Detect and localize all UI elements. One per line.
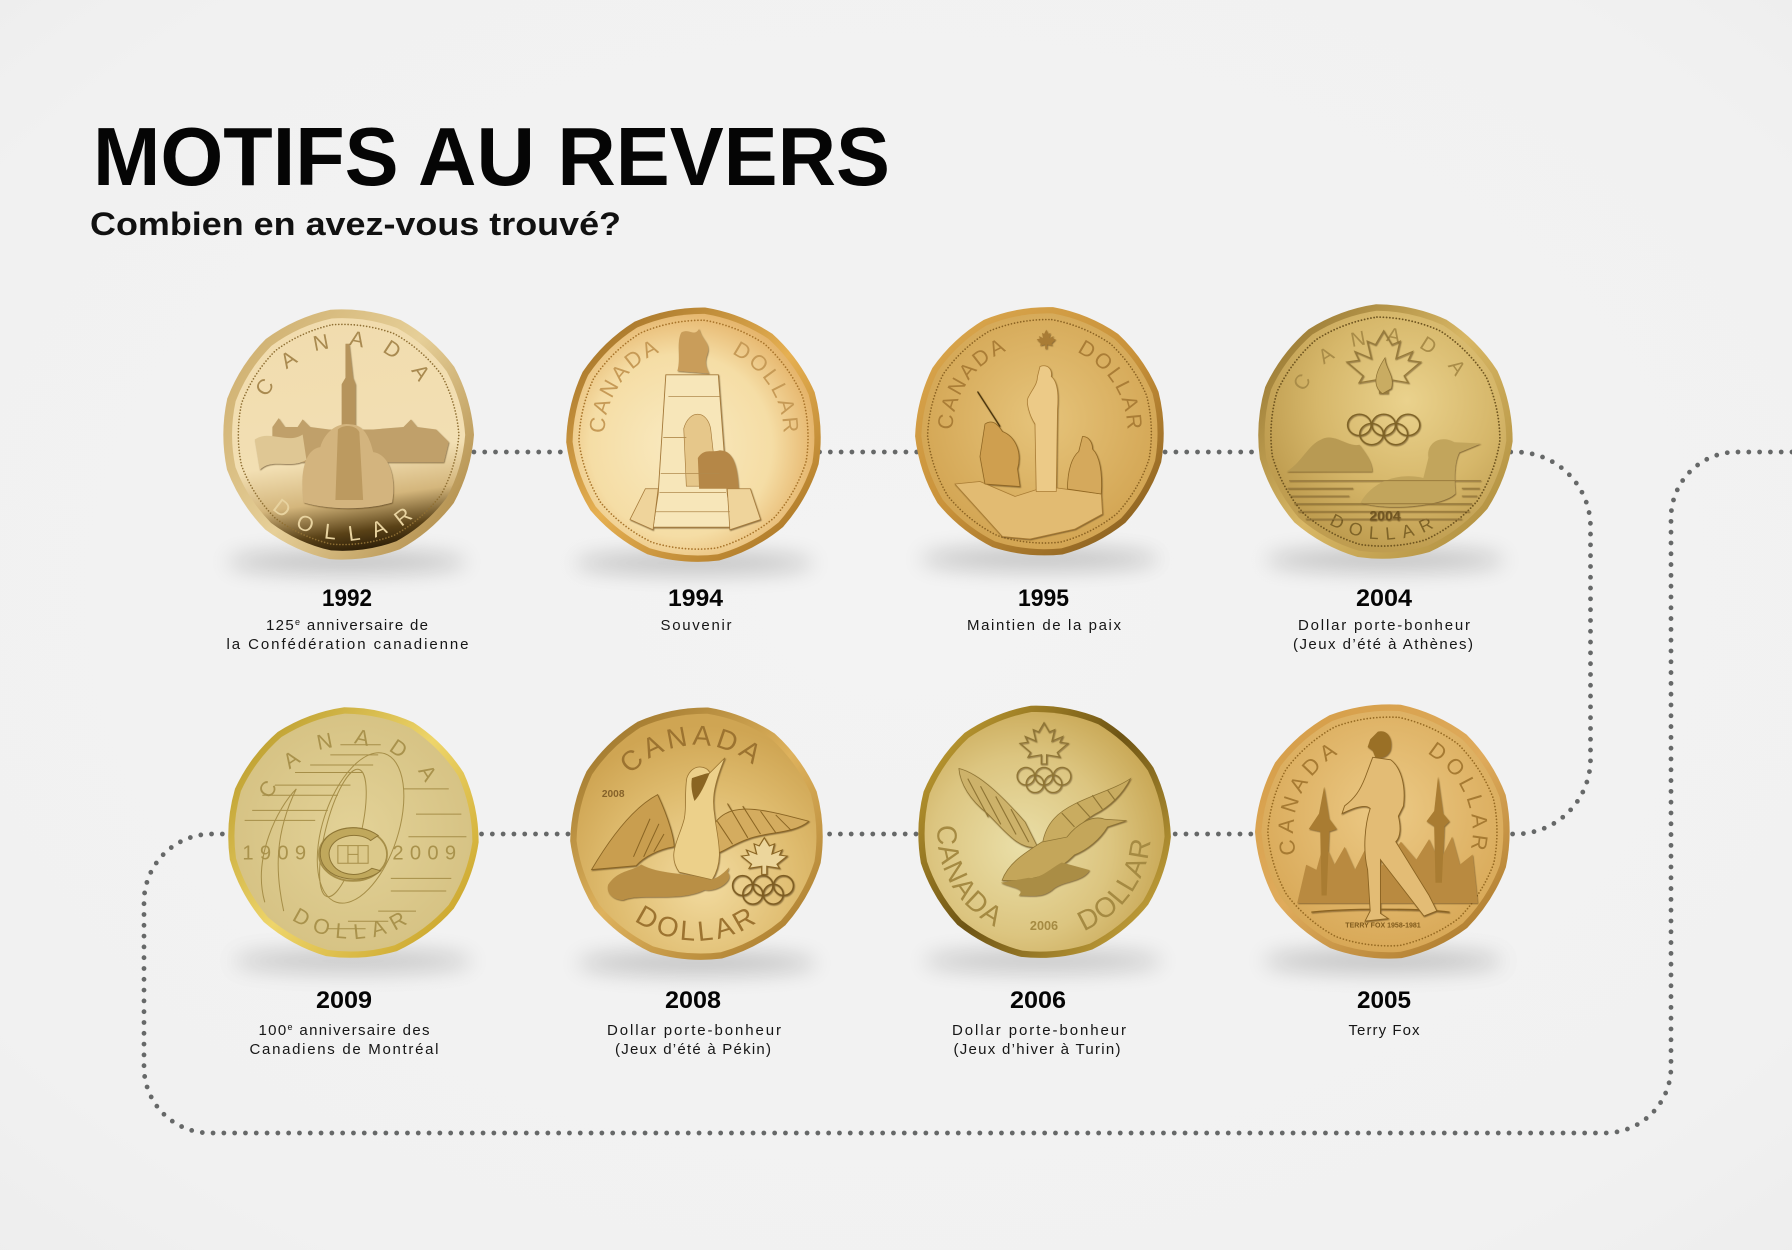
label: 1995: [967, 585, 1122, 634]
motif: Terry Fox running through forest: [1297, 731, 1478, 921]
label: 2004: [1293, 585, 1473, 653]
coin text: Canada Dollar: DOLLAR: [292, 908, 408, 940]
coin text: Canada Dollar: [938, 340, 1142, 429]
label: 2006: Dollar porte-bonheur: [952, 1022, 1126, 1039]
coin text: Canada Dollar: CANADA: [590, 342, 660, 432]
coin text: Canada Dollar: 2008: [602, 789, 625, 800]
label: 2009: [250, 987, 438, 1058]
coin: 2009: [228, 707, 479, 981]
coin text: Canada Dollar: CANADA: [622, 726, 758, 770]
coin: 1994: [566, 308, 821, 584]
label: 2006: (Jeux d’hiver à Turin): [954, 1041, 1120, 1058]
coin text: Canada Dollar: CANADA: [257, 332, 428, 394]
label: 1992: 1992: [322, 585, 372, 612]
label: 2009: 2009: [316, 987, 372, 1014]
coin text: Canada Dollar: DOLLAR: [1077, 840, 1150, 930]
coin text: Canada Dollar: CANADA: [1294, 328, 1464, 389]
label: 2009: e: [288, 1022, 293, 1032]
label: 2006: [952, 987, 1126, 1058]
label: 1995: 1995: [1018, 585, 1069, 612]
coin text: Canada Dollar: [590, 342, 798, 432]
label: 2009: Canadiens de Montréal: [250, 1041, 438, 1058]
motif: Flying loon: [959, 723, 1130, 896]
motif: Leaf, rings and loon: [1286, 331, 1481, 523]
label: 2004: 2004: [1356, 585, 1413, 612]
coin text: Canada Dollar: TERRY FOX 1958-1981: [1345, 922, 1421, 929]
label: 1992: la Confédération canadienne: [226, 636, 468, 653]
label: 2005: 2005: [1357, 987, 1411, 1014]
coin text: Canada Dollar: [1294, 328, 1464, 540]
label: 2009: anniversaire des: [294, 1022, 430, 1039]
motif: Peacekeeping monument: [955, 330, 1102, 539]
label: 2008: Dollar porte-bonheur: [607, 1022, 781, 1039]
coin text: Canada Dollar: DOLLAR: [636, 905, 756, 941]
coin: 2005: [1255, 704, 1510, 982]
coin text: Canada Dollar: [1278, 742, 1488, 929]
motif: National War Memorial: [630, 329, 761, 530]
coin: 1995: [915, 307, 1164, 580]
coin: 1992: [223, 309, 474, 583]
coin text: Canada Dollar: DOLLAR: [1078, 340, 1142, 429]
motif: Parliament and children: [255, 344, 449, 508]
label: 1994: Souvenir: [660, 617, 732, 634]
dotted connector path: [144, 452, 1792, 1133]
coin text: Canada Dollar: [602, 726, 758, 941]
coin text: Canada Dollar: CANADA: [937, 826, 998, 927]
label: 1995: Maintien de la paix: [967, 617, 1122, 634]
label: 2005: [1348, 987, 1420, 1039]
label: 1992: [226, 585, 468, 653]
label: 1992: anniversaire de: [301, 617, 428, 634]
motif: Leaf, rings and loon: 2004: [1369, 507, 1401, 523]
label: 1994: [660, 585, 732, 634]
coin text: Canada Dollar: DOLLAR: [1330, 514, 1434, 540]
coin: 2008: [570, 708, 823, 984]
label: 2008: [607, 987, 781, 1058]
coin text: Canada Dollar: CANADA: [938, 340, 1006, 428]
coin text: Canada Dollar: CANADA: [260, 730, 434, 796]
label: 2008: 2008: [665, 987, 721, 1014]
coin: 2004: [1258, 304, 1513, 581]
title: MOTIFS AU REVERS: [93, 110, 890, 203]
coin: 2006: [918, 706, 1171, 981]
label: 2004: Dollar porte-bonheur: [1298, 617, 1470, 634]
label: 2005: Terry Fox: [1348, 1022, 1420, 1039]
coin text: Canada Dollar: DOLLAR: [733, 342, 798, 432]
coin text: Canada Dollar: 2009: [392, 842, 462, 864]
label: 2004: (Jeux d’été à Athènes): [1293, 636, 1473, 653]
coin text: Canada Dollar: 2006: [1030, 919, 1058, 933]
motif: Loon with spread wings: [592, 758, 809, 904]
coin text: Canada Dollar: [937, 826, 1150, 933]
coin text: Canada Dollar: DOLLAR: [1428, 742, 1488, 850]
label: 2006: 2006: [1010, 987, 1066, 1014]
motif: Canadiens logo and stripes: [245, 742, 466, 929]
label: 2008: (Jeux d’été à Pékin): [615, 1041, 771, 1058]
label: 1992: e: [295, 617, 300, 627]
coin text: Canada Dollar: [257, 332, 428, 541]
subtitle: Combien en avez-vous trouvé?: [90, 206, 621, 242]
label: 2009: 100: [258, 1022, 286, 1039]
coin text: Canada Dollar: 1909: [242, 842, 312, 864]
label: 1994: 1994: [668, 585, 724, 612]
coin text: Canada Dollar: [242, 730, 462, 940]
coin text: Canada Dollar: DOLLAR: [273, 498, 413, 541]
coin text: Canada Dollar: CANADA: [1278, 745, 1338, 854]
label: 1992: 125: [266, 617, 294, 634]
